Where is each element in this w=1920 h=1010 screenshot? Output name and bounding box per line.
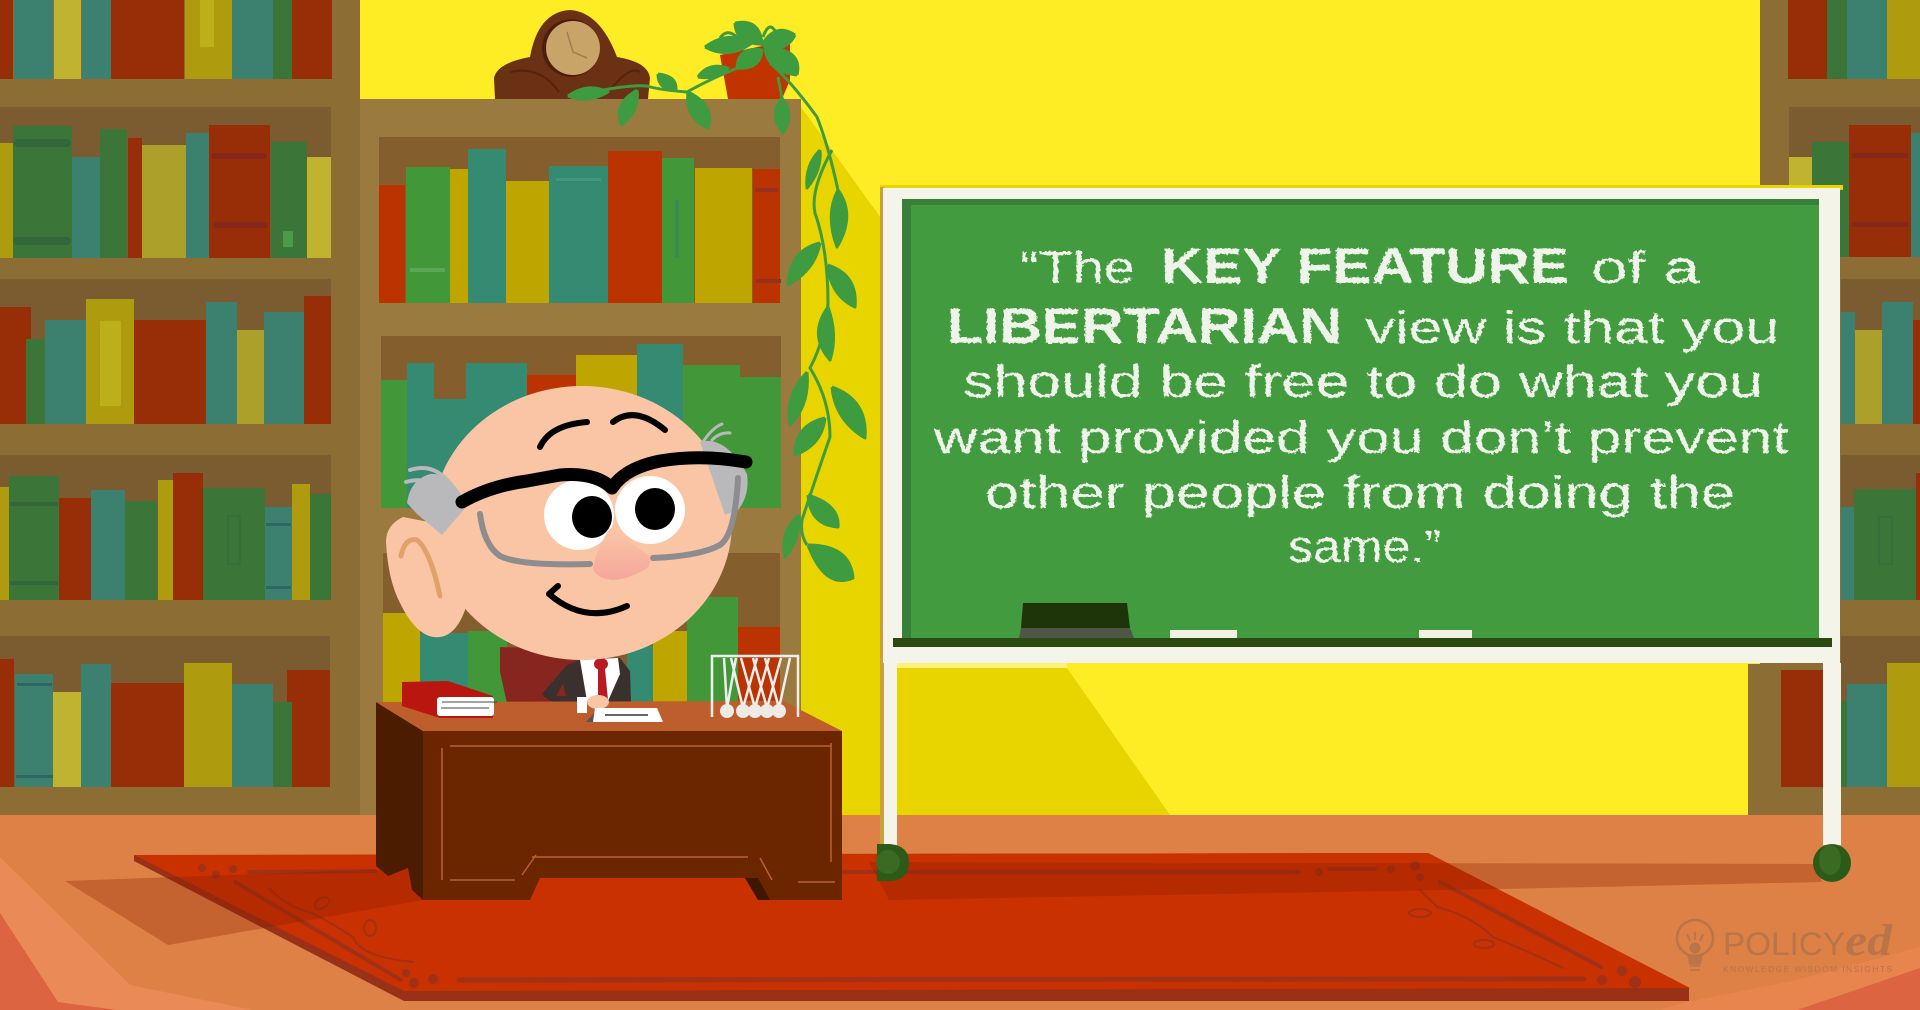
desk front	[423, 731, 842, 900]
desk side	[376, 702, 423, 900]
left wheel	[876, 844, 909, 881]
desk shadow	[65, 868, 423, 945]
logo: PolicyEd: KNOWLEDGE WISDOM INSIGHTS	[1723, 964, 1892, 974]
jacket	[542, 658, 631, 705]
eyebrows	[540, 415, 665, 447]
middle shelf 3 books	[383, 597, 780, 723]
shelf 1 books	[0, 0, 332, 79]
head	[432, 386, 732, 660]
nose	[593, 528, 650, 580]
chalkboard quote: of a	[1591, 242, 1701, 293]
character: professor	[386, 386, 748, 705]
chalkboard quote: want provided you don’t prevent	[933, 412, 1790, 463]
hair left	[406, 468, 467, 535]
rug	[134, 853, 1690, 1001]
smile	[549, 586, 627, 613]
left bookcase	[0, 0, 360, 815]
middle shelf 2 books	[381, 344, 781, 508]
shirt	[580, 658, 620, 701]
rug pattern	[235, 869, 1601, 980]
chair	[500, 647, 585, 703]
glasses frame	[462, 458, 746, 564]
eraser	[1019, 603, 1134, 638]
shelf 5 books	[0, 659, 330, 787]
ear	[386, 517, 470, 637]
desk	[376, 701, 842, 900]
shelf 4 books	[0, 473, 331, 600]
chalkboard quote: KEY FEATURE	[1161, 238, 1569, 294]
ear fold	[401, 540, 440, 596]
left leg	[884, 663, 897, 845]
shelf 3 books	[0, 296, 331, 424]
shelf 2 books	[0, 125, 331, 258]
wall shadow under chalkboard	[897, 663, 1170, 815]
newton's cradle	[712, 656, 798, 718]
desk top	[376, 701, 842, 731]
red book	[402, 681, 497, 718]
chalk pieces	[1170, 630, 1472, 639]
right wheel	[1813, 844, 1851, 882]
logo: PolicyEd	[1677, 916, 1893, 974]
wall shadow beside middle bookcase	[801, 107, 883, 815]
chalkboard quote: other people from doing the	[985, 467, 1735, 518]
chalkboard quote: LIBERTARIAN	[947, 298, 1342, 354]
middle shelf 1 books	[379, 149, 781, 303]
middle bookcase	[360, 99, 801, 815]
plant	[568, 22, 865, 581]
hand and name plate	[577, 695, 663, 722]
logo bulb icon	[1677, 920, 1713, 970]
chalkboard quote: same.”	[1288, 521, 1441, 572]
logo: PolicyEd: POLICY	[1723, 926, 1845, 962]
chalkboard quote: should be free to do what you	[963, 356, 1763, 407]
chalkboard	[876, 185, 1851, 882]
logo: PolicyEd: ed	[1845, 916, 1893, 965]
right bookcase	[1748, 0, 1920, 815]
chalkboard quote: view is that you	[1365, 302, 1779, 353]
desk feet shadow	[745, 878, 770, 900]
chalkboard shadow	[869, 862, 1822, 900]
chalkboard quote	[933, 238, 1790, 572]
chalkboard quote: “The	[1020, 242, 1135, 293]
clock	[494, 10, 650, 99]
chalk tray	[893, 638, 1832, 647]
tie	[594, 658, 608, 700]
floor	[0, 815, 1920, 1010]
right leg	[1823, 663, 1841, 845]
eye whites	[544, 476, 685, 550]
pupils	[572, 488, 675, 538]
desk trim	[442, 743, 835, 882]
hair right	[700, 424, 748, 515]
